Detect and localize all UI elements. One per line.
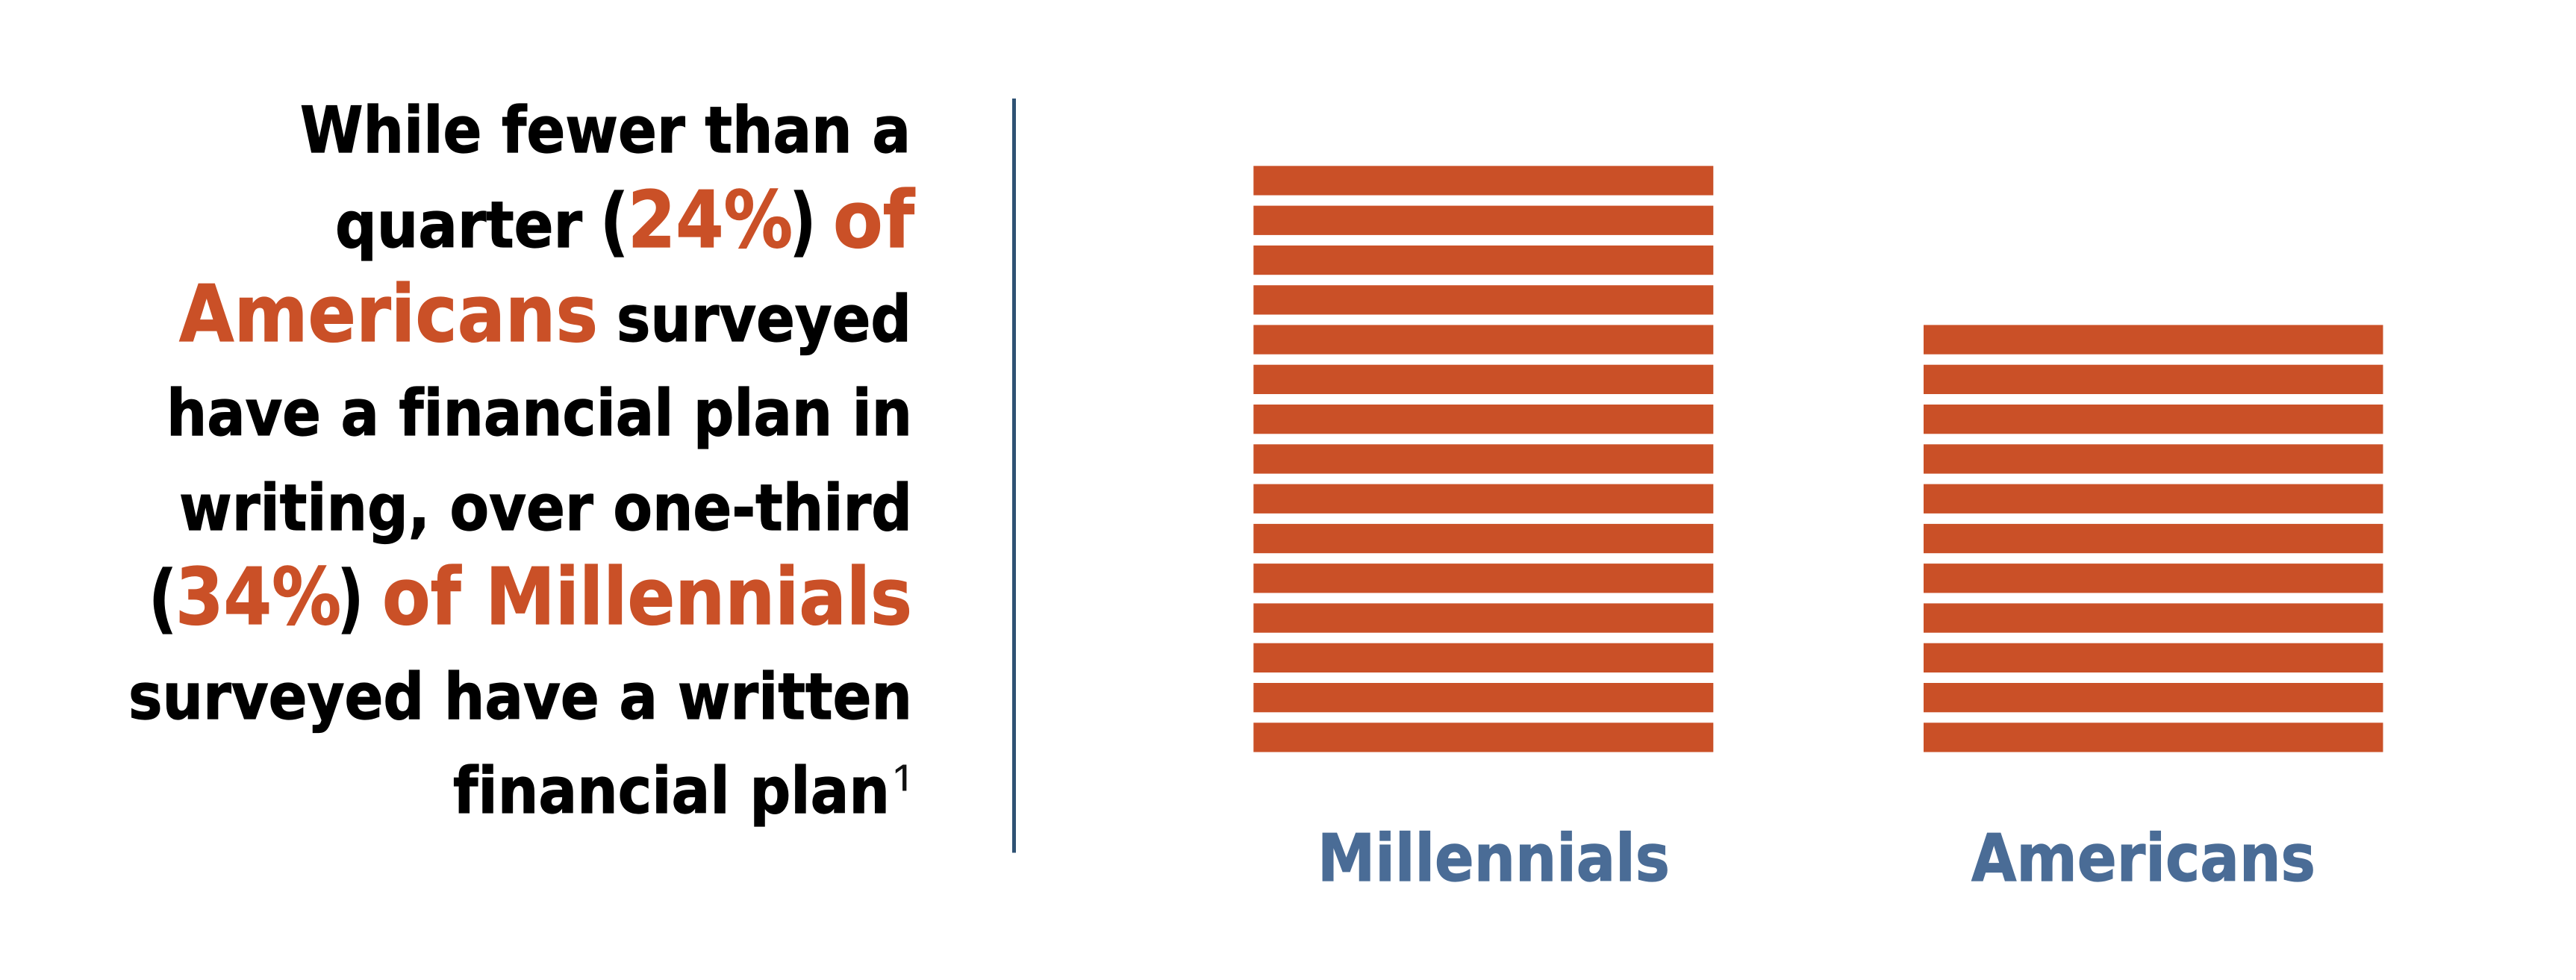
- highlight: Americans: Americans: [179, 269, 598, 360]
- open parenthesis: (: [600, 178, 629, 265]
- highlight: of: of: [833, 175, 915, 266]
- text block: financial plan statement: [128, 94, 916, 828]
- stat: 34%: 34%: [175, 552, 341, 643]
- bar: Millennials 34%: [1253, 166, 1713, 752]
- vertical divider: [1012, 99, 1016, 852]
- highlight: of Millennials: of Millennials: [382, 552, 912, 643]
- line 4: have a financial plan in: [166, 377, 912, 451]
- line 8: financial plan: [453, 755, 890, 828]
- bar chart: Millennials vs Americans: [1253, 166, 2383, 896]
- line 7: surveyed have a written: [128, 661, 912, 734]
- close parenthesis: ): [790, 178, 816, 265]
- line 1: While fewer than a: [300, 94, 911, 168]
- stat: 24%: 24%: [628, 175, 793, 266]
- close parenthesis line 6: ): [337, 555, 364, 642]
- footnote marker: 1: [891, 755, 916, 805]
- line 5: writing, over one-third: [179, 472, 912, 546]
- line 3: surveyed: surveyed: [617, 283, 911, 357]
- label: Millennials: Millennials: [1317, 820, 1670, 896]
- line 2: quarter: quarter: [335, 189, 582, 263]
- label: Americans: Americans: [1971, 820, 2315, 896]
- bar: Americans 24%: [1924, 325, 2383, 752]
- open parenthesis line 6: (: [149, 555, 177, 642]
